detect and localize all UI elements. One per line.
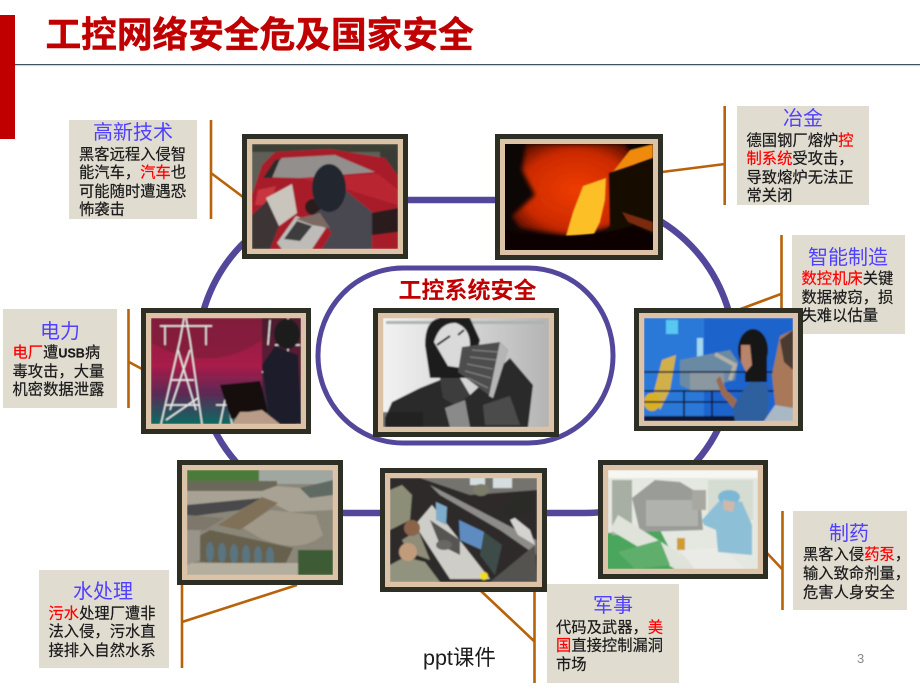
center heading: 工控系统安全 — [398, 277, 536, 303]
photo: anonymous-mask hacker with keyboard — [373, 308, 559, 437]
panel: metallurgy text: 制系统受攻击， — [746, 150, 854, 168]
panel: smart manufacturing text: 智能制造 — [808, 246, 888, 269]
panel: high tech text: 能汽车，汽车也 — [79, 164, 186, 182]
panel: water text: 污水处理厂遭非 — [48, 606, 156, 622]
connector: high tech — [211, 120, 243, 219]
panel: smart manufacturing text: 数控机床关键 — [802, 270, 893, 288]
connector: pharma — [767, 511, 782, 610]
panel: high tech text: 高新技术 — [93, 121, 173, 144]
footer note: ppt课件 — [423, 646, 496, 670]
connector: smart manufacturing — [738, 235, 782, 310]
panel: power text: 毒攻击，大量 — [12, 364, 104, 380]
panel: military text: 军事 — [593, 594, 633, 617]
photo: wastewater treatment plant — [177, 460, 343, 585]
panel: pharma text — [793, 511, 910, 610]
panel: metallurgy text: 常关闭 — [746, 188, 792, 204]
panel: high tech text: 可能随时遭遇恐 — [79, 184, 186, 200]
panel: smart manufacturing text — [802, 246, 893, 324]
panel: pharma text: 黑客入侵药泵， — [803, 546, 910, 564]
panel: military text: 国直接控制漏洞 — [556, 638, 663, 654]
panel: metallurgy text — [737, 106, 869, 205]
photo: hacker with laptop in front of red car — [242, 134, 408, 259]
panel: pharma text: 危害人身安全 — [803, 584, 895, 602]
panel: water text — [39, 570, 169, 668]
panel: pharma text: 输入致命剂量， — [803, 564, 910, 582]
connector: water — [182, 584, 297, 668]
connector: metallurgy — [662, 106, 725, 205]
panel: military text — [547, 584, 679, 683]
panel: military text: 市场 — [556, 656, 587, 674]
panel: power text: 电力 — [40, 320, 80, 343]
panel: water text: 接排入自然水系 — [48, 642, 156, 660]
panel: pharma text: 制药 — [829, 522, 869, 545]
panel: high tech text: 怖袭击 — [79, 202, 125, 218]
panel: high tech text: 黑客远程入侵智 — [79, 146, 186, 164]
panel: power text — [3, 309, 117, 408]
connector: military — [481, 590, 534, 683]
page number: 3 — [857, 651, 864, 666]
panel: water text: 法入侵，污水直 — [48, 624, 156, 640]
photo: smart factory control wall — [634, 308, 803, 431]
panel: metallurgy text: 冶金 — [783, 107, 823, 130]
photo: military cyber operations room — [380, 468, 547, 592]
connector: power — [128, 309, 142, 408]
photo: pharmaceutical production line — [598, 460, 768, 579]
inner ring around the core system — [318, 268, 613, 443]
panel: smart manufacturing box — [792, 235, 905, 334]
panel: military text: 代码及武器，美 — [556, 620, 663, 636]
outer ring connecting the industries — [197, 200, 735, 513]
photo: transmission towers with masked hacker — [141, 308, 311, 434]
title: 工控网络安全危及国家安全 — [46, 15, 474, 55]
panel: high tech text — [69, 120, 197, 219]
panel: metallurgy text: 德国钢厂熔炉控 — [746, 132, 854, 150]
panel: smart manufacturing text: 失难以估量 — [802, 308, 878, 324]
photo: molten steel furnace — [495, 134, 663, 260]
left red accent bar — [0, 15, 15, 139]
panel: power text: 机密数据泄露 — [12, 382, 104, 398]
panel: metallurgy text: 导致熔炉无法正 — [746, 170, 854, 186]
panel: water text: 水处理 — [73, 580, 133, 603]
panel: power text: 电厂遭USB病 — [12, 344, 100, 362]
panel: smart manufacturing text: 数据被窃，损 — [802, 290, 893, 306]
